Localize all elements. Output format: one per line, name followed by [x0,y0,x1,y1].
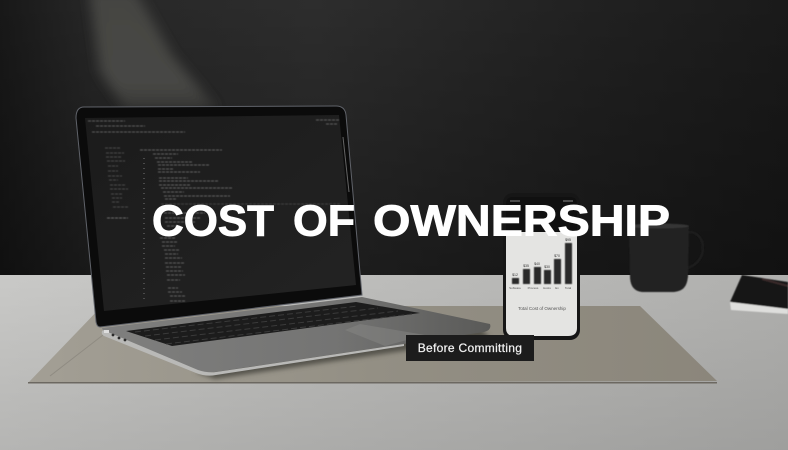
notebook and pen [730,275,788,314]
subtitle badge [406,335,534,361]
bar value labels: $30 [544,265,550,269]
smartphone [503,193,580,340]
bar value labels: $70 [554,254,560,258]
editor menu bar [88,120,340,132]
keyboard keys [135,306,412,344]
laptop screen [85,115,356,311]
chart axis labels [509,286,571,290]
laptop shadow [195,328,490,379]
title: OF [293,196,355,246]
keyboard [126,302,420,346]
table surface [0,275,788,450]
scrollbar [343,137,349,192]
chart axis labels: Ex [555,286,559,290]
bar value labels [512,238,571,277]
bar chart [512,243,572,284]
chart axis labels: Process [528,286,539,290]
chart axis labels: Total [565,286,571,290]
phone body [503,193,580,340]
bar value labels: $40 [534,262,540,266]
trackpad [345,324,425,346]
laptop lid [76,106,362,327]
chart axis labels: Software [509,286,521,290]
bar value labels: $35 [523,264,529,268]
line numbers [143,158,145,300]
laptop base [102,297,490,372]
laptop [76,106,490,379]
subtitle badge: Before Committing [418,341,522,355]
side ports [104,330,126,341]
title: OWNERSHIP [373,196,670,246]
bar value labels: $12 [512,273,518,277]
code lines [140,150,232,199]
file tree [105,148,128,207]
silver front edge [102,330,404,376]
code editor content [88,120,340,301]
wall background [0,0,788,276]
status bar [510,200,573,202]
desk mat [28,306,717,384]
phone screen [506,232,577,336]
chart axis labels: Hosts [543,286,551,290]
title: COST [152,196,274,246]
light beam on wall [89,0,218,110]
chart caption: Total Cost of Ownership [518,306,566,311]
bar value labels: $95 [565,238,571,242]
coffee mug [629,224,703,292]
